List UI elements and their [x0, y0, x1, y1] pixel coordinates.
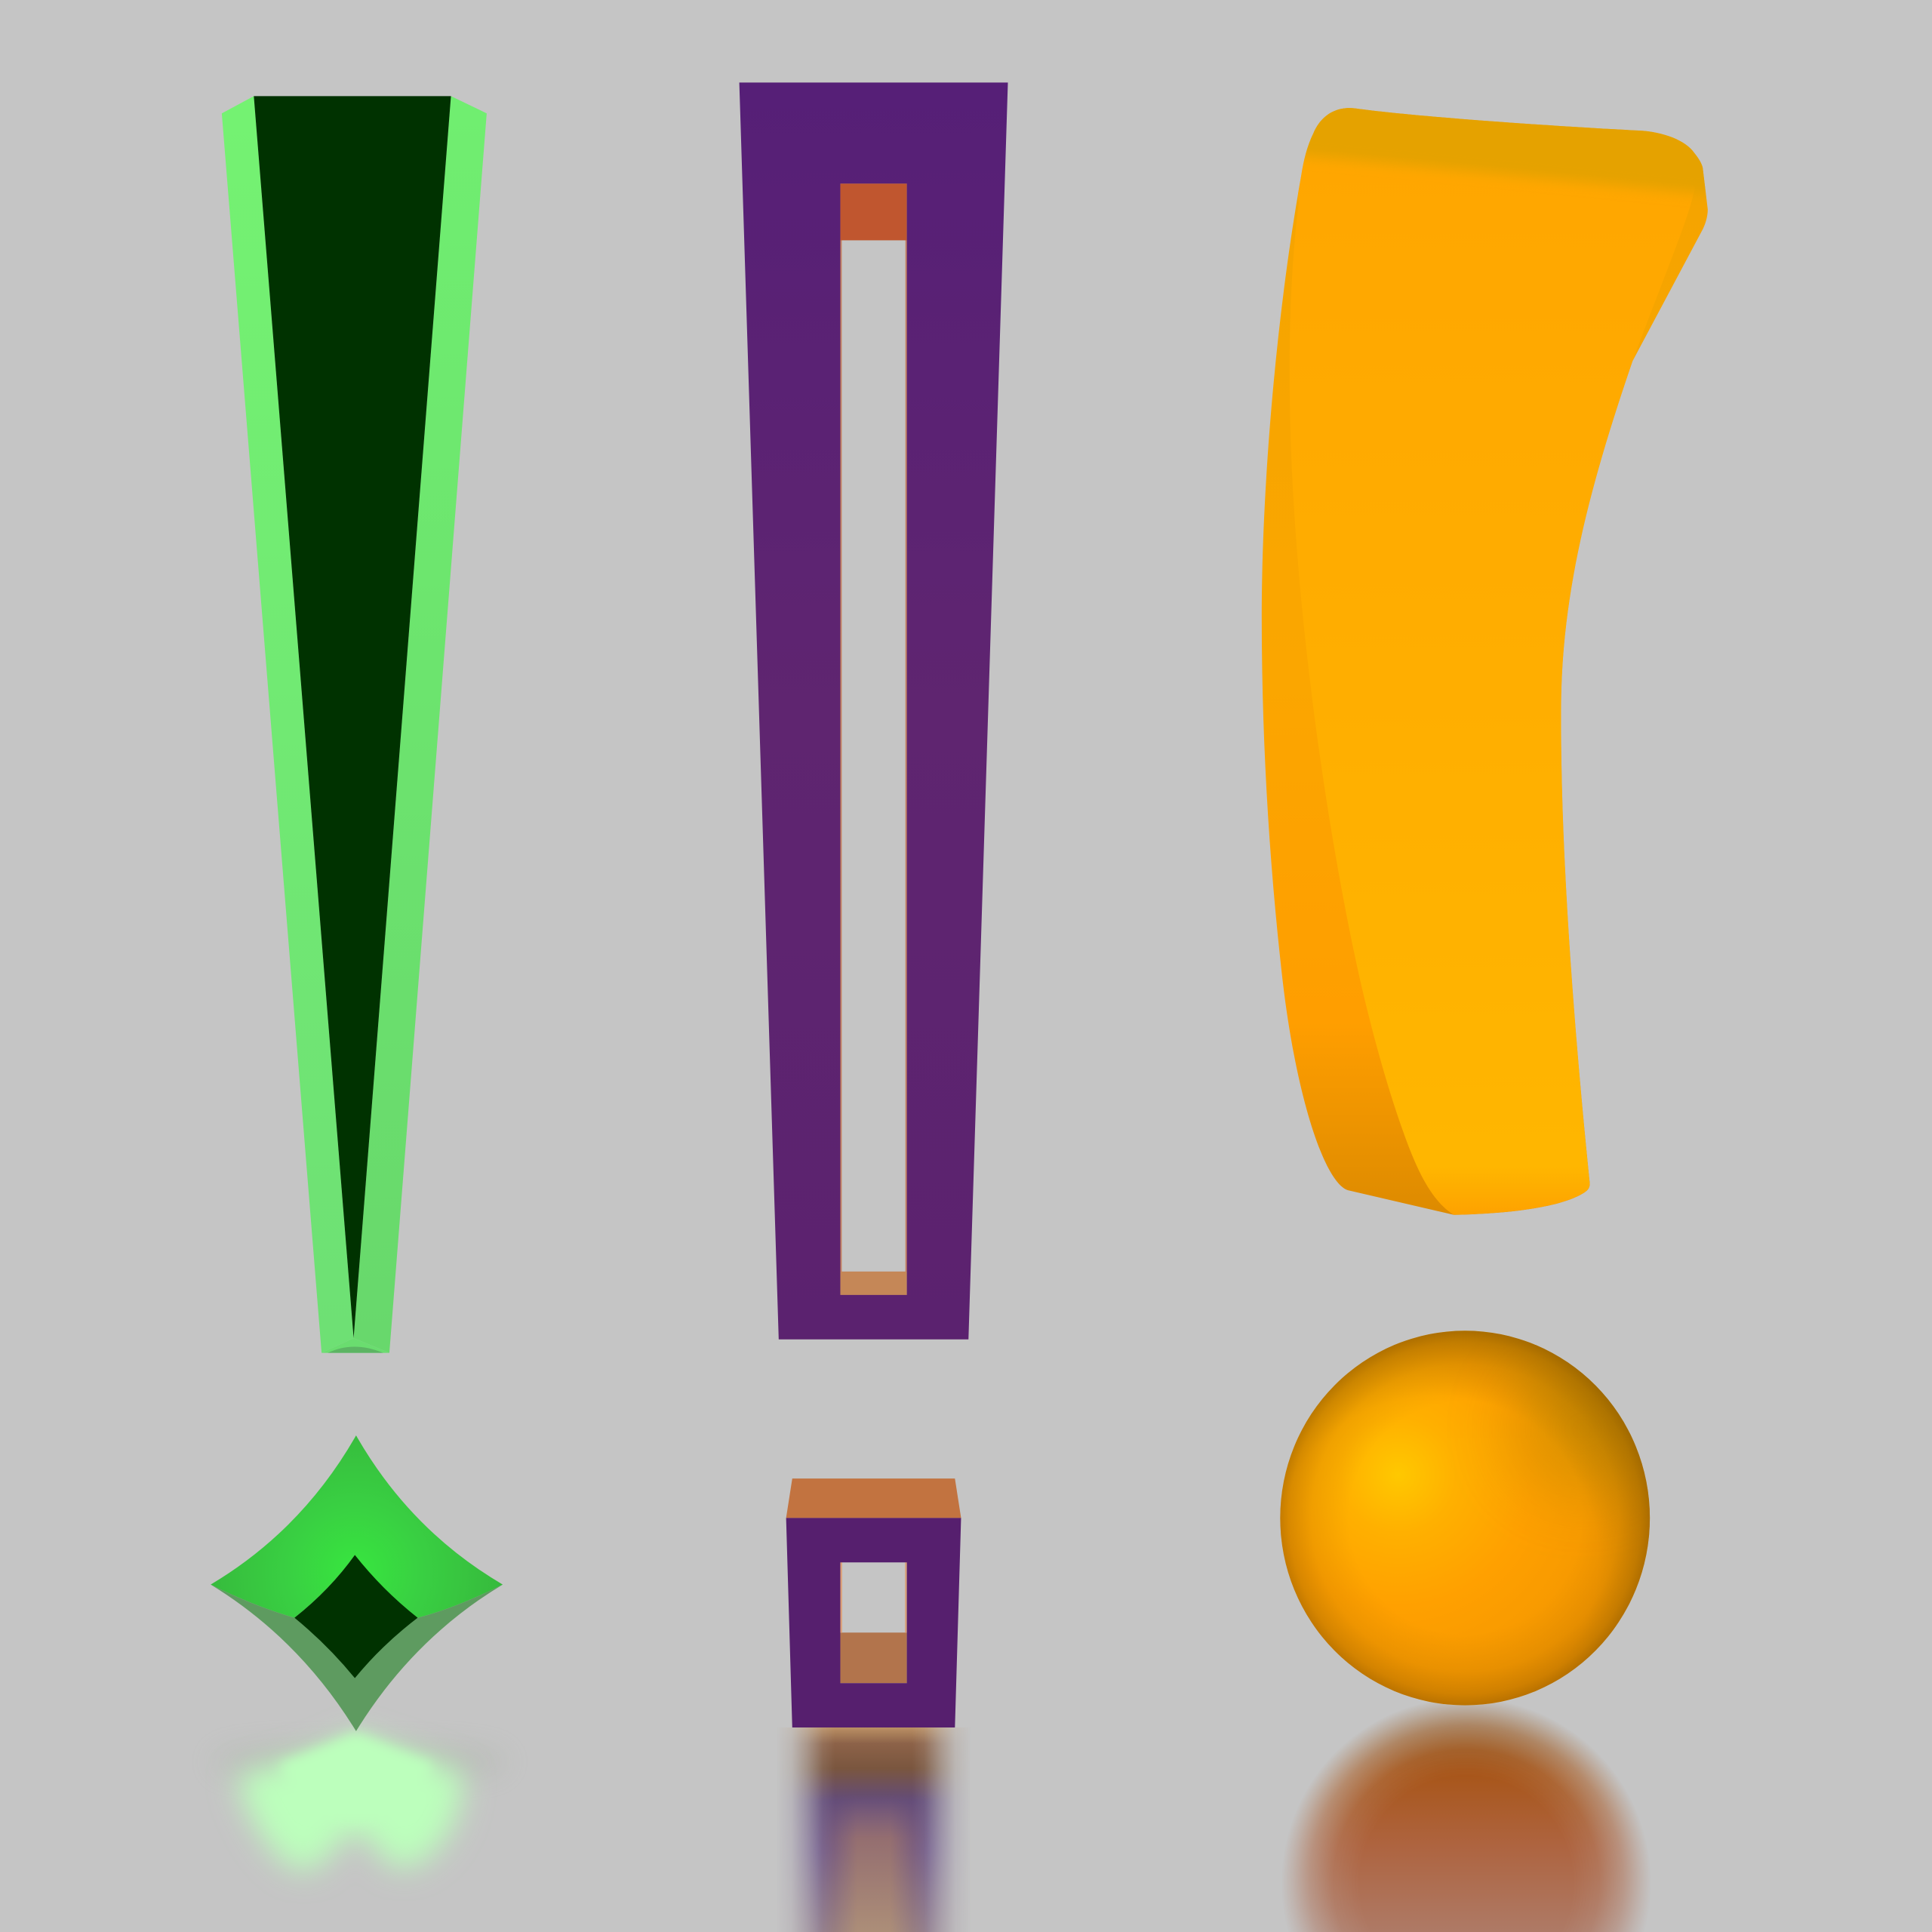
lower faces — [211, 1585, 503, 1731]
scene: three 3D exclamation marks — [211, 82, 1708, 1932]
purple exclamation bar — [740, 82, 1008, 1340]
front face — [786, 1518, 961, 1727]
green diamond dot — [211, 1435, 503, 1731]
purple reflection — [777, 1727, 971, 1932]
upper faces — [211, 1435, 503, 1618]
bar silhouette (side face) — [1262, 108, 1708, 1215]
orange exclamation bar — [1262, 86, 1725, 1215]
top face — [1304, 108, 1707, 199]
front face — [1290, 148, 1696, 1215]
green diamond reflection — [212, 1733, 508, 1871]
dark inner diamond — [294, 1555, 417, 1678]
orange sphere dot — [1280, 1331, 1650, 1706]
orange reflection — [1284, 1703, 1647, 1932]
purple square dot — [786, 1478, 961, 1727]
top face — [786, 1478, 961, 1518]
green exclamation bar — [222, 96, 487, 1353]
